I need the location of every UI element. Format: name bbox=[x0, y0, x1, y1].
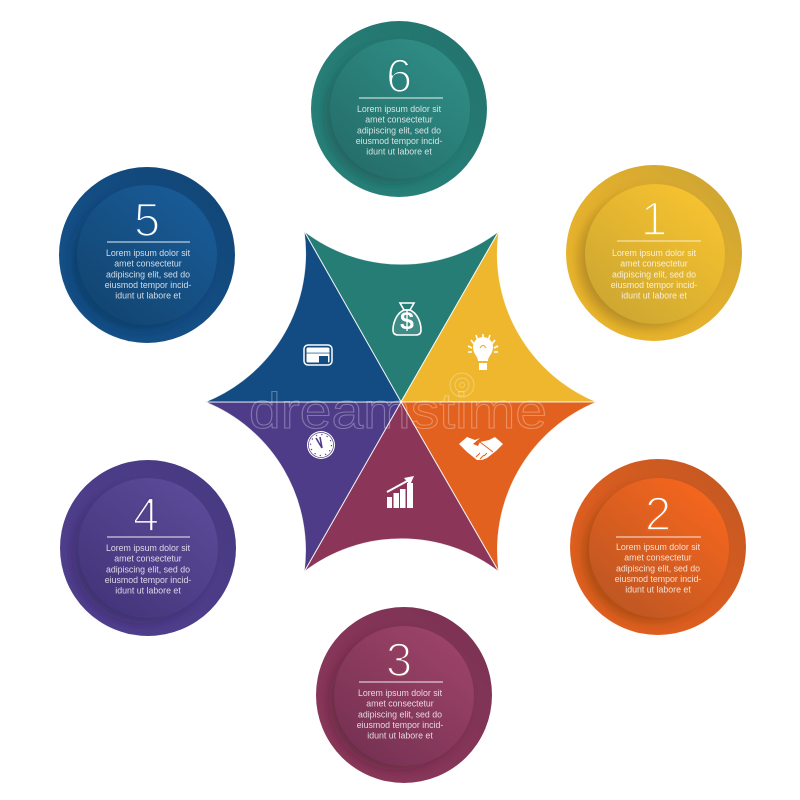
text block 4: eiusmod tempor incid- bbox=[105, 575, 191, 585]
text block 1: amet consectetur bbox=[620, 258, 688, 268]
text block 5: Lorem ipsum dolor sit bbox=[106, 248, 191, 258]
circle 1: yellow step bbox=[566, 165, 742, 341]
icon: credit card bbox=[304, 345, 332, 365]
watermark: dreamstime bbox=[249, 383, 547, 439]
text block 5: amet consectetur bbox=[114, 258, 182, 268]
text block 6 bbox=[356, 104, 442, 156]
icon: handshake bbox=[459, 437, 503, 460]
text block 2: amet consectetur bbox=[624, 552, 692, 562]
number 2: 2 bbox=[645, 487, 671, 540]
star segment: teal bbox=[304, 231, 499, 402]
central six-pointed star bbox=[205, 231, 597, 572]
text block 2: idunt ut labore et bbox=[625, 584, 691, 594]
icon: growth chart bbox=[387, 476, 414, 508]
text block 2: Lorem ipsum dolor sit bbox=[616, 542, 701, 552]
text block 1: adipiscing elit, sed do bbox=[612, 270, 696, 280]
text block 5: eiusmod tempor incid- bbox=[105, 280, 191, 290]
text block 5: idunt ut labore et bbox=[115, 290, 181, 300]
text block 3: eiusmod tempor incid- bbox=[357, 720, 443, 730]
text block 6: eiusmod tempor incid- bbox=[356, 136, 442, 146]
icon: clock bbox=[307, 431, 335, 459]
text block 4 bbox=[105, 543, 191, 596]
icon: light bulb bbox=[468, 334, 498, 370]
text block 5: adipiscing elit, sed do bbox=[106, 270, 190, 280]
circle 6: teal step bbox=[311, 21, 487, 197]
number 3: 3 bbox=[386, 633, 412, 686]
number 1: 1 bbox=[641, 192, 667, 245]
text block 3: Lorem ipsum dolor sit bbox=[358, 688, 443, 698]
text block 3: idunt ut labore et bbox=[367, 730, 433, 740]
circle 5: blue step bbox=[59, 167, 235, 343]
text block 6: Lorem ipsum dolor sit bbox=[357, 104, 442, 114]
text block 1: Lorem ipsum dolor sit bbox=[612, 248, 697, 258]
text block 4: adipiscing elit, sed do bbox=[106, 564, 190, 574]
star segment: plum bbox=[304, 402, 499, 572]
number 5: 5 bbox=[134, 193, 160, 246]
text block 4: idunt ut labore et bbox=[115, 586, 181, 596]
text block 5 bbox=[105, 248, 191, 300]
text block 4: Lorem ipsum dolor sit bbox=[106, 543, 191, 553]
star segment: yellow bbox=[401, 231, 597, 402]
star segment: orange bbox=[401, 402, 597, 572]
star segment: blue bbox=[205, 231, 401, 402]
star segment: purple bbox=[205, 402, 401, 572]
text block 4: amet consectetur bbox=[114, 554, 182, 564]
text block 6: amet consectetur bbox=[365, 114, 433, 124]
icon: money bag bbox=[393, 303, 421, 335]
text block 2: eiusmod tempor incid- bbox=[615, 574, 701, 584]
icon: money bag: $ bbox=[400, 307, 414, 335]
text block 3: adipiscing elit, sed do bbox=[358, 710, 442, 720]
text block 6: idunt ut labore et bbox=[366, 146, 432, 156]
number 4: 4 bbox=[133, 488, 159, 541]
text block 1: idunt ut labore et bbox=[621, 290, 687, 300]
circle 4: purple step bbox=[60, 460, 236, 636]
text block 1: eiusmod tempor incid- bbox=[611, 280, 697, 290]
text block 2 bbox=[615, 542, 701, 594]
circle 3: plum step bbox=[316, 607, 492, 783]
number 6: 6 bbox=[386, 49, 412, 102]
text block 3 bbox=[357, 688, 443, 740]
circle 2: orange step bbox=[570, 459, 746, 635]
text block 1 bbox=[611, 248, 697, 300]
text block 2: adipiscing elit, sed do bbox=[616, 564, 700, 574]
text block 3: amet consectetur bbox=[366, 698, 434, 708]
text block 6: adipiscing elit, sed do bbox=[357, 126, 441, 136]
